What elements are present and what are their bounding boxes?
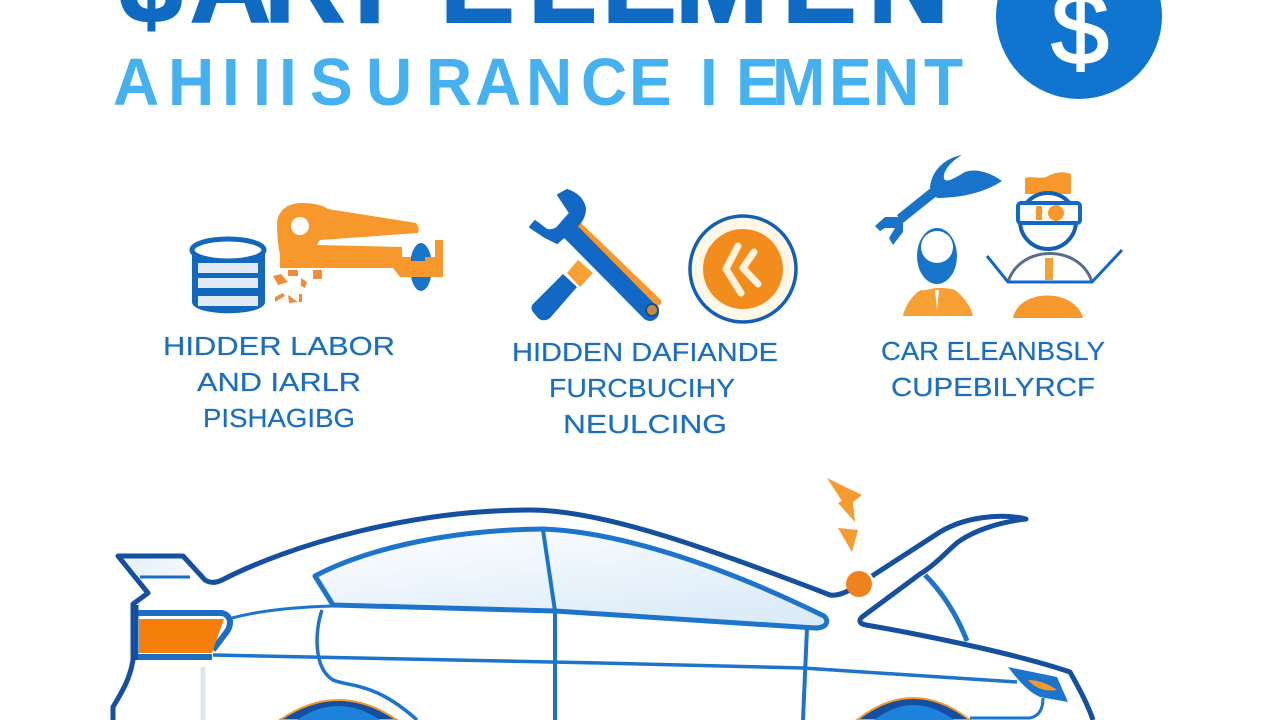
icon: hammer handle [532, 260, 593, 320]
impact sparks [827, 478, 862, 552]
label: hidden damage: NEULCING [563, 409, 727, 439]
label: car capability [881, 336, 1105, 402]
icon: wrench [530, 190, 658, 316]
label: hidden labor: HIDDER LABOR [163, 331, 395, 361]
icon: orange coin [690, 216, 796, 322]
label: hidden labor: PISHAGIBG [203, 403, 355, 433]
panel: hidden damage [512, 190, 796, 439]
label: hidden labor: AND IARLR [197, 367, 361, 397]
spoiler inner line [140, 576, 190, 578]
impact point [846, 571, 872, 597]
panel: car capability [875, 155, 1122, 402]
spoiler fill [122, 557, 192, 577]
label: hidden damage: FURCBUCIHY [549, 373, 735, 403]
icon: dollar coin [996, 0, 1162, 99]
head light [1008, 667, 1068, 702]
label: hidden damage: HIDDEN DAFIANDE [512, 337, 778, 367]
car body lines [213, 529, 1043, 720]
label: car capability: CAR ELEANBSLY [881, 336, 1105, 366]
car windows [315, 528, 827, 628]
car illustration [113, 478, 1093, 720]
car outline [113, 510, 1093, 720]
label: car capability: CUPEBILYRCF [891, 372, 1095, 402]
icon: mechanic small [903, 228, 973, 316]
panel: hidden labor [163, 203, 443, 433]
title [113, 0, 963, 119]
icon: wrench [875, 155, 1002, 245]
label: hidden labor [163, 331, 395, 433]
icon: stacked database [192, 239, 265, 313]
label: hidden damage [512, 337, 778, 439]
tail light [136, 605, 230, 720]
wheels [280, 698, 970, 720]
title line 2: AHIIISURANCE IEMENT [113, 45, 963, 119]
icon: engineer [987, 172, 1122, 318]
icon: orange machine [273, 203, 443, 303]
